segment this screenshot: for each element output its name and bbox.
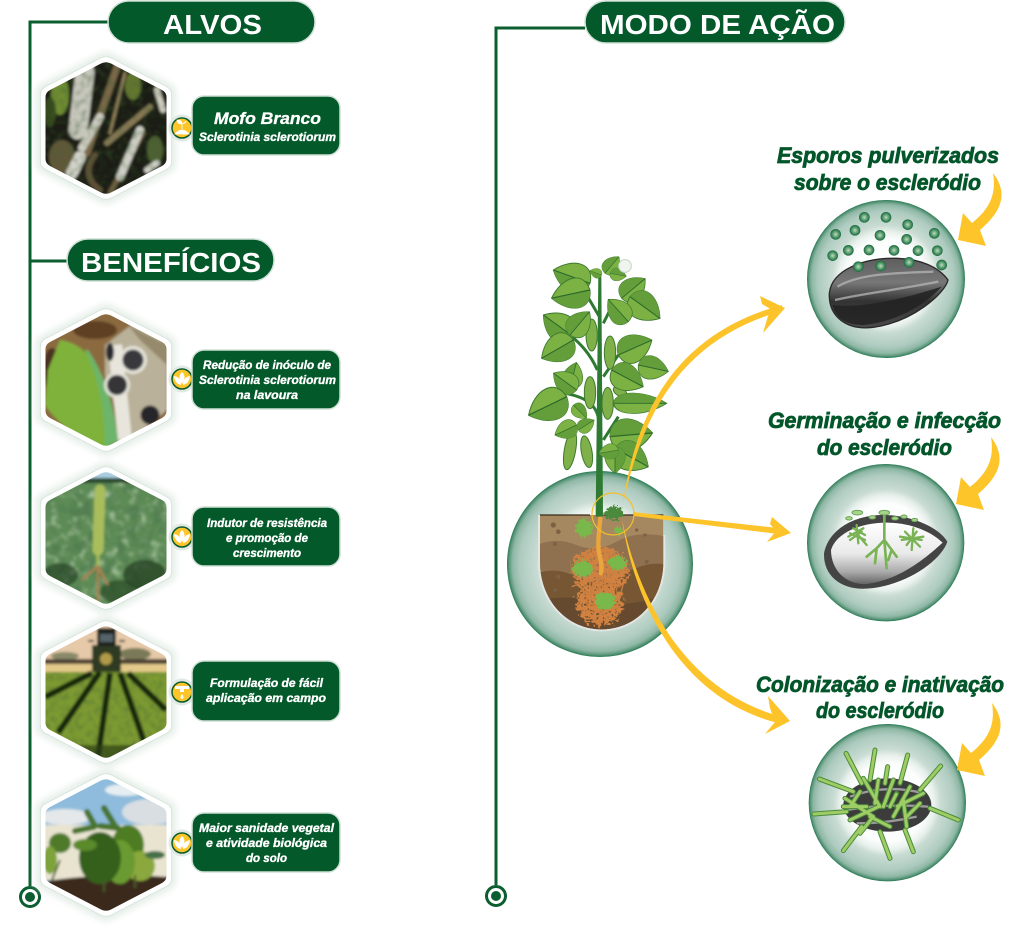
label: Maior sanidade: Maior sanidade vegetal — [199, 821, 335, 835]
step 3 heading: Colonização e inativação — [756, 672, 1004, 697]
label: Mofo Branco — [192, 96, 340, 155]
label: Indutor de resistência: crescimento — [233, 546, 301, 560]
heading: ALVOS: ALVOS — [163, 9, 262, 40]
icon: sprout — [168, 114, 196, 142]
step 1 curved arrow — [958, 173, 1002, 246]
step 2 sphere: germination in sclerotium — [807, 464, 964, 621]
photo: sclerotia on leaf — [36, 304, 176, 456]
step 2 curved arrow — [956, 437, 1000, 510]
pods — [561, 319, 629, 471]
label: Maior sanidade: e atividade biológica — [206, 836, 327, 850]
highlight circle on soil — [592, 493, 634, 535]
label: Indutor de resistência: Indutor de resistência — [207, 516, 327, 530]
heading: BENEFÍCIOS — [67, 239, 274, 281]
step 1 heading: Esporos pulverizados — [777, 143, 999, 168]
label: Indutor de resistência — [192, 507, 340, 566]
fine roots — [572, 547, 628, 626]
arrow: to germination — [633, 512, 791, 542]
step 3 curved arrow — [957, 703, 1001, 776]
label: Formulação: Formulação de fácil — [210, 676, 324, 690]
label: Redução de inóculo: Sclerotinia sclerotiorum — [199, 373, 336, 387]
flower — [588, 251, 631, 283]
step 1 heading: sobre o escleródio — [794, 170, 981, 195]
arrow: to colonization — [622, 520, 790, 734]
label: Redução de inóculo — [192, 350, 340, 409]
illustration: plant in soil sphere — [507, 251, 693, 657]
step 1 heading — [777, 143, 999, 195]
step 3 heading — [756, 672, 1004, 723]
icon: leaves — [168, 830, 196, 856]
label: Formulação — [192, 661, 340, 721]
icon: leaves — [168, 524, 196, 550]
heading: BENEFÍCIOS: BENEFÍCIOS — [81, 247, 261, 278]
step 2 heading — [768, 408, 1001, 460]
heading: ALVOS — [108, 1, 315, 43]
label: Indutor de resistência: e promoção de — [226, 531, 308, 545]
step 2 heading: do escleródio — [817, 435, 952, 460]
label: Maior sanidade — [192, 813, 340, 872]
step 3 sphere: colonized sclerotium — [809, 724, 966, 881]
photo: soybean field with uprooted plant — [36, 462, 176, 614]
leaves — [522, 256, 671, 479]
label: Mofo Branco: Mofo Branco — [214, 109, 321, 128]
photo: white mold on stems — [36, 52, 176, 204]
label: Mofo Branco: Sclerotinia sclerotiorum — [199, 130, 336, 144]
arrow: to sprayed spores — [623, 296, 785, 503]
root colonies — [573, 519, 627, 609]
heading: MODO DE AÇÃO — [585, 1, 845, 43]
label: Redução de inóculo: na lavoura — [236, 388, 298, 402]
label: Redução de inóculo: Redução de inóculo de — [203, 358, 331, 372]
label: Maior sanidade: do solo — [246, 851, 287, 865]
step 2 heading: Germinação e infecção — [768, 408, 1001, 433]
photo: tractor spraying field — [36, 616, 176, 770]
timeline: right — [486, 28, 585, 906]
step 3 heading: do escleródio — [816, 698, 944, 723]
photo: seedlings at sunset — [36, 769, 178, 925]
taproot — [598, 513, 602, 573]
plant stem and branches — [565, 275, 618, 517]
label: Formulação: aplicação em campo — [206, 691, 326, 705]
step 1 sphere: spores on sclerotium — [807, 200, 965, 358]
timeline: left — [20, 22, 108, 906]
icon: leaves — [168, 366, 196, 392]
moss on surface — [605, 507, 623, 520]
icon: spray nozzle — [168, 678, 196, 706]
heading: MODO DE AÇÃO: MODO DE AÇÃO — [600, 9, 835, 40]
